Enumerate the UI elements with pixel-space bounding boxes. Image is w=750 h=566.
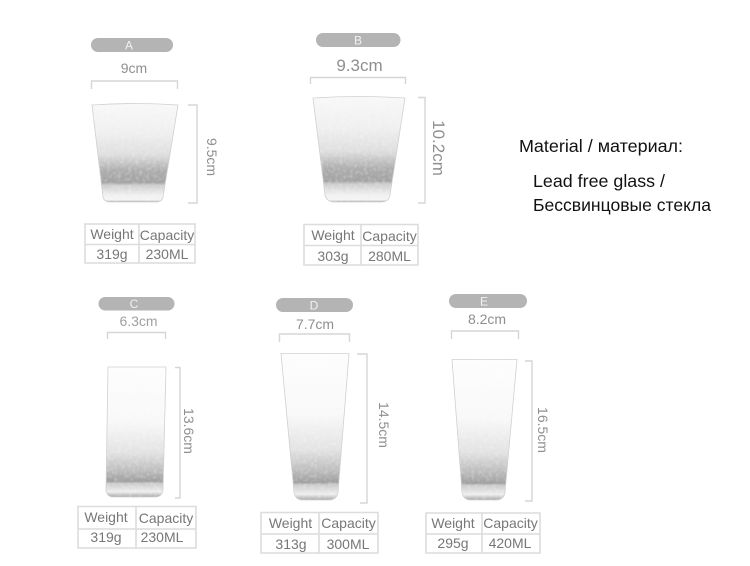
label pill E: E bbox=[480, 294, 488, 308]
material description: Бессвинцовые стекла bbox=[533, 195, 711, 215]
spec table C: Weight bbox=[84, 509, 128, 525]
label pill A bbox=[91, 38, 173, 52]
spec table B: 280ML bbox=[368, 248, 411, 264]
spec table E: 295g bbox=[437, 535, 469, 551]
spec table D: 313g bbox=[275, 536, 307, 552]
width dimension D: 7.7cm bbox=[296, 316, 334, 332]
spec table A bbox=[85, 224, 195, 263]
glass illustration B bbox=[313, 96, 405, 202]
glass illustration E bbox=[452, 360, 517, 500]
glass group E bbox=[426, 294, 551, 553]
label pill A: A bbox=[125, 38, 133, 52]
glass group C bbox=[78, 297, 197, 548]
label pill E bbox=[449, 294, 527, 308]
spec table A: Capacity bbox=[140, 227, 194, 243]
height dimension C bbox=[175, 368, 197, 498]
width dimension B: 9.3cm bbox=[336, 56, 383, 75]
spec table D: Capacity bbox=[321, 515, 376, 531]
height dimension D bbox=[357, 354, 392, 503]
width dimension E bbox=[452, 311, 518, 339]
spec table D: Weight bbox=[269, 515, 312, 531]
material description: Lead free glass / bbox=[533, 171, 665, 191]
width dimension A: 9cm bbox=[121, 60, 147, 76]
height dimension B bbox=[418, 98, 448, 203]
width dimension C: 6.3cm bbox=[119, 313, 158, 329]
width dimension E: 8.2cm bbox=[468, 311, 506, 327]
spec table C: 230ML bbox=[141, 529, 184, 545]
width dimension C bbox=[108, 313, 166, 339]
label pill C bbox=[98, 297, 174, 311]
glass illustration D bbox=[281, 354, 349, 500]
spec table D bbox=[261, 512, 378, 553]
label pill B: B bbox=[354, 34, 362, 48]
spec table C: 319g bbox=[90, 529, 122, 545]
spec table C: Capacity bbox=[139, 510, 193, 526]
spec table E: Weight bbox=[431, 515, 475, 531]
label pill C: C bbox=[130, 297, 139, 311]
spec table E: 420ML bbox=[489, 535, 532, 551]
spec table B: Weight bbox=[311, 227, 355, 243]
material heading: Material / материал: bbox=[519, 136, 683, 156]
spec table A: 230ML bbox=[146, 246, 189, 262]
glass illustration A bbox=[92, 104, 178, 202]
spec table B bbox=[304, 224, 418, 265]
width dimension A bbox=[92, 60, 178, 89]
spec table E: Capacity bbox=[483, 515, 538, 531]
label pill D: D bbox=[310, 298, 319, 312]
material description bbox=[533, 171, 711, 215]
height dimension A bbox=[188, 105, 220, 203]
width dimension D bbox=[280, 316, 350, 342]
height dimension E bbox=[525, 361, 551, 501]
label pill D bbox=[276, 298, 353, 312]
spec table A: 319g bbox=[96, 246, 128, 262]
height dimension A: 9.5cm bbox=[204, 138, 220, 176]
glass group A bbox=[85, 38, 220, 263]
spec table A: Weight bbox=[90, 226, 134, 242]
spec table C bbox=[78, 506, 196, 548]
spec table E bbox=[426, 513, 540, 553]
glass group B bbox=[304, 33, 448, 265]
glass illustration C bbox=[106, 367, 166, 497]
spec table B: 303g bbox=[317, 248, 349, 264]
height dimension C: 13.6cm bbox=[181, 408, 197, 454]
height dimension D: 14.5cm bbox=[376, 402, 392, 448]
label pill B bbox=[316, 33, 400, 48]
height dimension E: 16.5cm bbox=[535, 407, 551, 453]
spec table D: 300ML bbox=[327, 536, 370, 552]
height dimension B: 10.2cm bbox=[429, 120, 448, 176]
spec table B: Capacity bbox=[362, 228, 417, 244]
glass group D bbox=[261, 298, 392, 553]
width dimension B bbox=[310, 56, 406, 84]
